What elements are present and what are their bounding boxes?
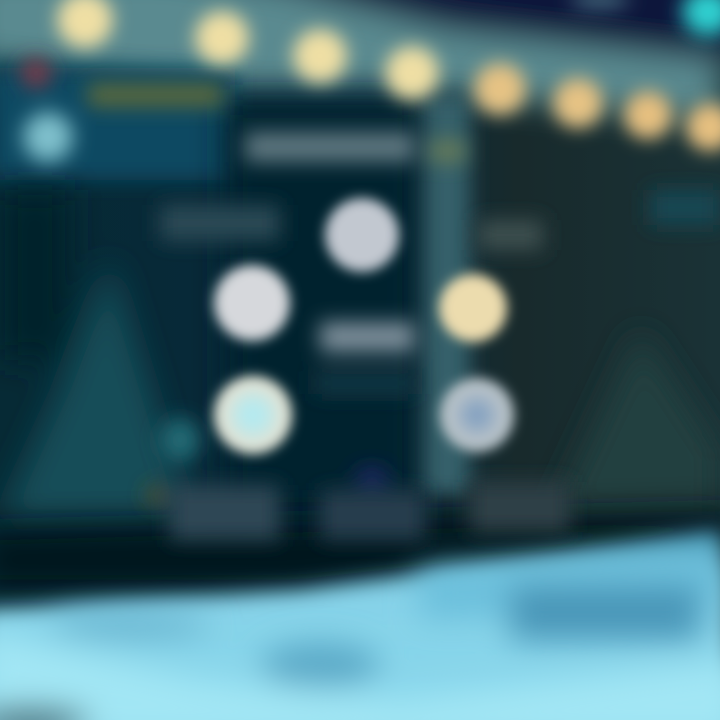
panel: upper left header xyxy=(0,68,235,180)
header marks xyxy=(21,58,465,162)
right mountain shapes xyxy=(550,330,720,520)
left mountain shapes xyxy=(0,190,190,520)
string of lights xyxy=(57,0,720,151)
bottom pale blue area xyxy=(0,530,720,720)
icon: circle middle left xyxy=(214,265,290,341)
icon: cyan corner glow xyxy=(570,0,720,36)
central dark panel xyxy=(225,100,420,520)
icon: circle upper centre xyxy=(325,198,399,272)
bottom highlights and darker text area xyxy=(0,555,720,720)
text block placeholders xyxy=(147,190,720,540)
icon: circle lower right xyxy=(440,378,514,452)
lower dark band xyxy=(0,510,720,590)
vertical column xyxy=(424,95,470,495)
icon: circle middle right xyxy=(439,274,507,342)
icon: circle lower left xyxy=(214,376,292,454)
top band xyxy=(0,0,720,120)
